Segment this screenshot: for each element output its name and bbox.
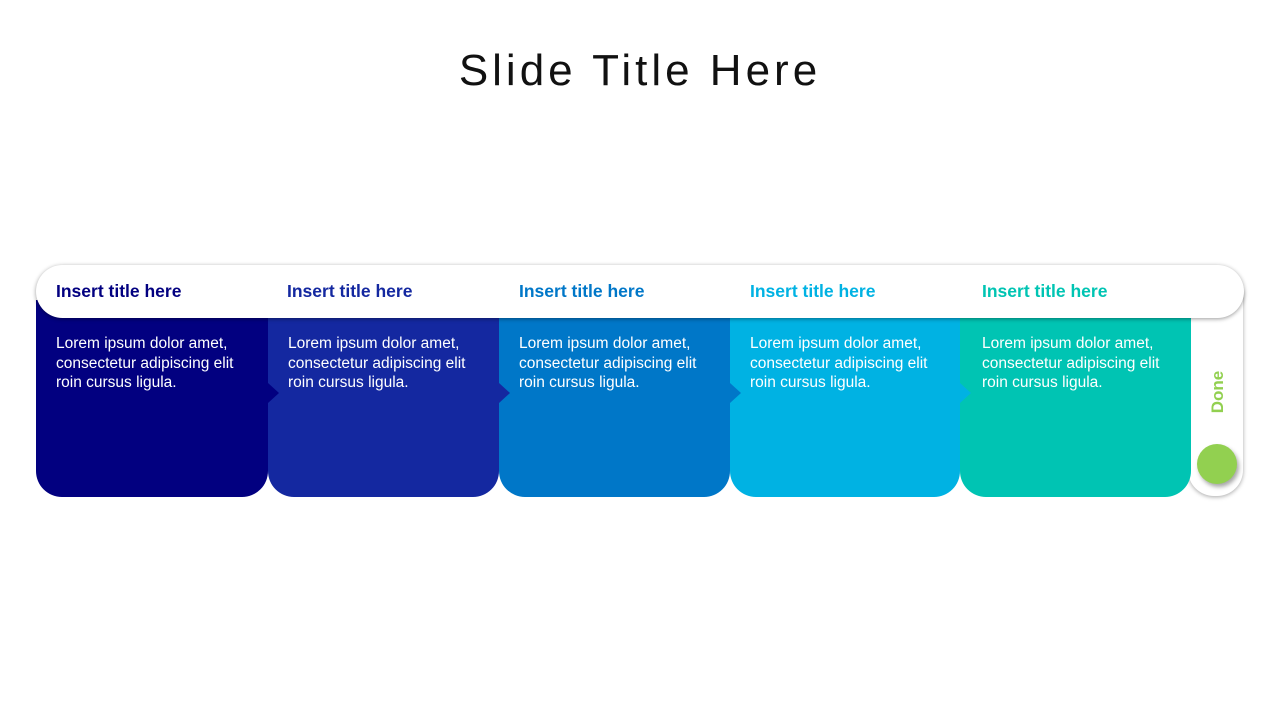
panel 4 — [730, 300, 960, 497]
panel 5: Lorem ipsum dolor amet, consectetur adipiscing elit roin cursus ligula. — [982, 335, 1160, 391]
panel 4: Lorem ipsum dolor amet, consectetur adipiscing elit roin cursus ligula. — [750, 335, 928, 391]
heading 5: Insert title here — [982, 281, 1107, 301]
panel 3 — [499, 300, 730, 497]
panel 2: Lorem ipsum dolor amet, consectetur adipiscing elit roin cursus ligula. — [288, 335, 466, 391]
panel 2 — [268, 300, 499, 497]
title: Slide Title Here — [459, 46, 821, 95]
panel 3: Lorem ipsum dolor amet, consectetur adipiscing elit roin cursus ligula. — [519, 335, 696, 391]
heading 2: Insert title here — [287, 281, 412, 301]
heading 3: Insert title here — [519, 281, 644, 301]
heading 1: Insert title here — [56, 281, 181, 301]
done column — [1188, 290, 1243, 496]
done label: Done — [1208, 371, 1227, 413]
done circle — [1197, 444, 1237, 484]
panel 1 — [36, 300, 268, 497]
panel 1: Lorem ipsum dolor amet, consectetur adipiscing elit roin cursus ligula. — [56, 335, 234, 391]
heading 4: Insert title here — [750, 281, 875, 301]
panel 5 — [960, 300, 1191, 497]
header bar — [36, 265, 1244, 318]
